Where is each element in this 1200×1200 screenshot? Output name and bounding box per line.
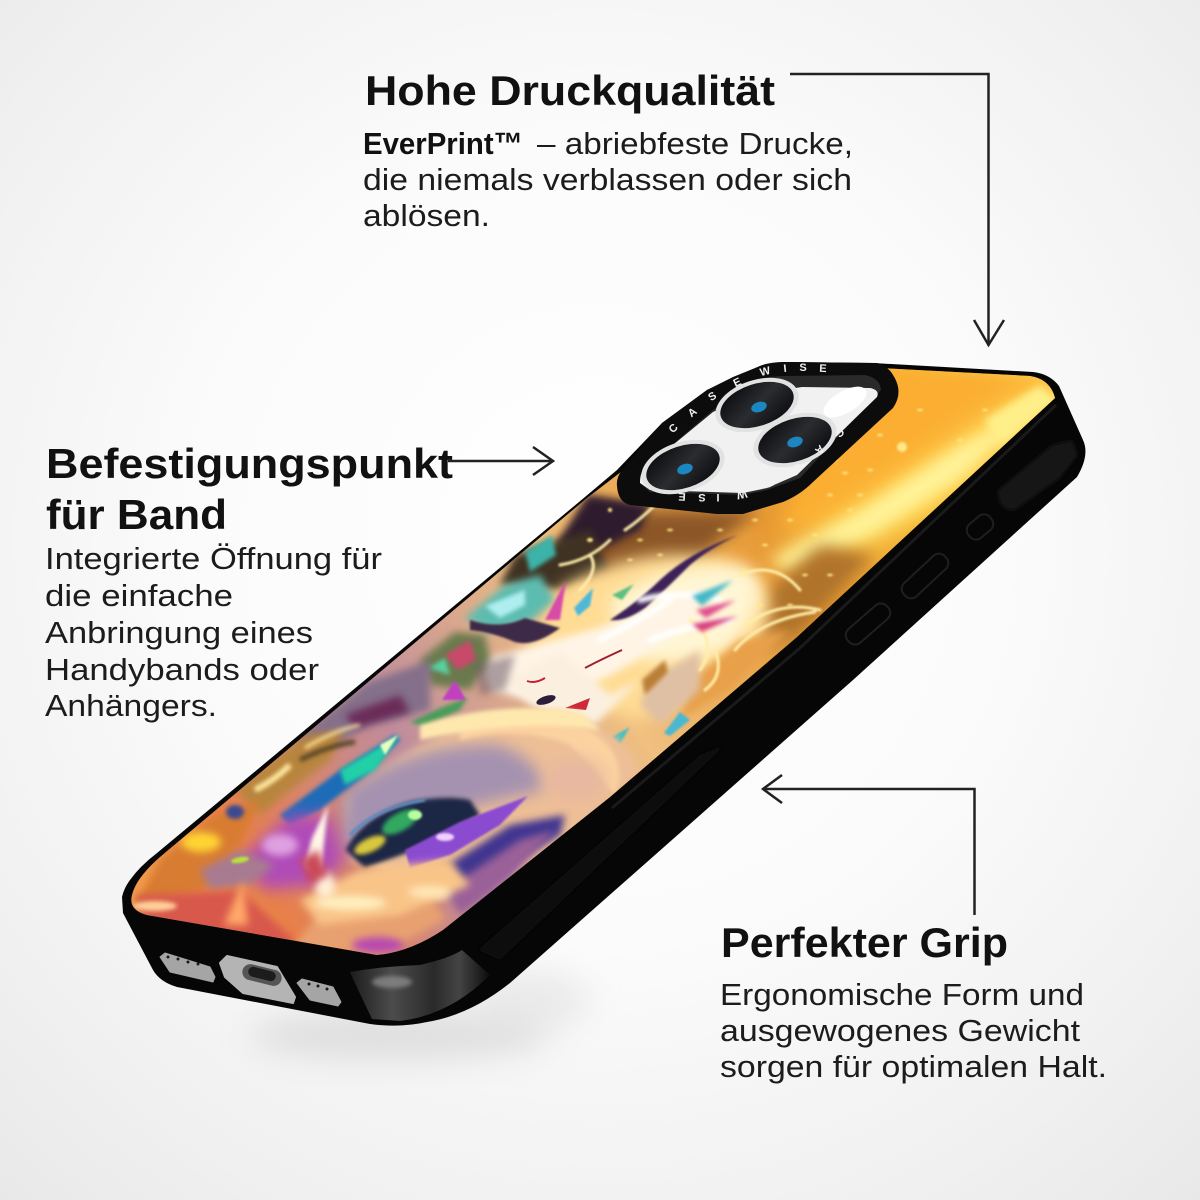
artwork: blue teal streak — [280, 735, 400, 825]
side buttons — [842, 511, 997, 648]
lenses — [634, 368, 844, 504]
bump lettering: E — [764, 475, 775, 489]
heading: für Band — [46, 491, 227, 538]
text block: die niemals verblassen oder sich — [363, 162, 852, 197]
text block — [45, 541, 382, 723]
bump lettering: S — [706, 390, 719, 404]
artwork: sky — [780, 365, 1060, 530]
heading — [46, 440, 453, 538]
text block — [720, 977, 1107, 1084]
artwork: tail eye swirl — [345, 798, 480, 868]
artwork: tail — [345, 712, 640, 900]
callout: print quality — [363, 67, 853, 233]
text block: EverPrint™ — [363, 126, 523, 161]
bump lettering: S — [799, 362, 807, 374]
camera window — [640, 387, 878, 493]
bump lettering — [667, 362, 846, 503]
text block: ausgewogenes Gewicht — [720, 1013, 1080, 1048]
text block — [363, 126, 853, 233]
artwork: fire and fox — [520, 554, 770, 720]
bump lettering: E — [678, 490, 686, 502]
heading: Hohe Druckqualität — [365, 67, 775, 114]
bump inner recess — [640, 375, 881, 495]
bump lettering: A — [686, 406, 699, 420]
heading: Befestigungspunkt — [46, 440, 453, 487]
right speaker — [297, 979, 341, 1006]
text block: sorgen für optimalen Halt. — [720, 1049, 1107, 1084]
artwork: upper left strands — [298, 658, 435, 743]
artwork: crystals — [410, 535, 738, 744]
phone case with artwork — [100, 340, 1100, 1026]
case side sheen — [612, 405, 1056, 808]
artwork: bottom colours — [240, 815, 345, 890]
text block: Integrierte Öffnung für — [45, 541, 382, 576]
case body — [122, 362, 1085, 1026]
artwork: fox face — [470, 618, 640, 730]
bump lettering: C — [667, 422, 681, 436]
text block: Anbringung eines — [45, 615, 313, 650]
bump lettering: I — [783, 363, 787, 375]
bottom corner highlight — [350, 950, 490, 1021]
text block: Anhängers. — [45, 688, 217, 723]
bump lettering: I — [716, 491, 720, 503]
heading: Perfekter Grip — [721, 919, 1008, 966]
bump lettering: E — [732, 376, 743, 390]
artwork: purple crystal — [405, 796, 528, 868]
arrow: strap attachment — [448, 447, 553, 475]
phone shadow — [250, 970, 590, 1061]
bump lettering: A — [812, 442, 826, 456]
text block: Handybands oder — [45, 652, 319, 687]
text block: Ergonomische Form und — [720, 977, 1084, 1012]
text block: – abriebfeste Drucke, — [537, 126, 853, 161]
artwork: sparks — [587, 409, 988, 606]
arrow: print quality — [790, 74, 1004, 345]
grip pad — [998, 440, 1078, 510]
bump lettering: C — [832, 425, 846, 439]
camera bump — [617, 362, 898, 514]
text block: die einfache — [45, 578, 233, 613]
charging port and speakers — [160, 953, 341, 1006]
bump lettering: W — [735, 487, 748, 501]
bump lettering: W — [759, 365, 772, 379]
bump lettering: S — [791, 460, 804, 474]
text block: ablösen. — [363, 198, 490, 233]
speaker holes — [166, 956, 328, 990]
flash — [819, 380, 871, 424]
artwork: flame strokes — [560, 505, 820, 690]
grip texture — [478, 745, 725, 960]
left speaker — [160, 953, 215, 982]
USB port — [220, 956, 295, 1003]
callout: grip — [720, 919, 1107, 1084]
artwork — [131, 368, 1055, 955]
bump lettering: E — [819, 363, 827, 375]
bump lettering: S — [698, 491, 706, 503]
arrow: grip — [763, 775, 974, 915]
callout: strap attachment — [45, 440, 453, 723]
